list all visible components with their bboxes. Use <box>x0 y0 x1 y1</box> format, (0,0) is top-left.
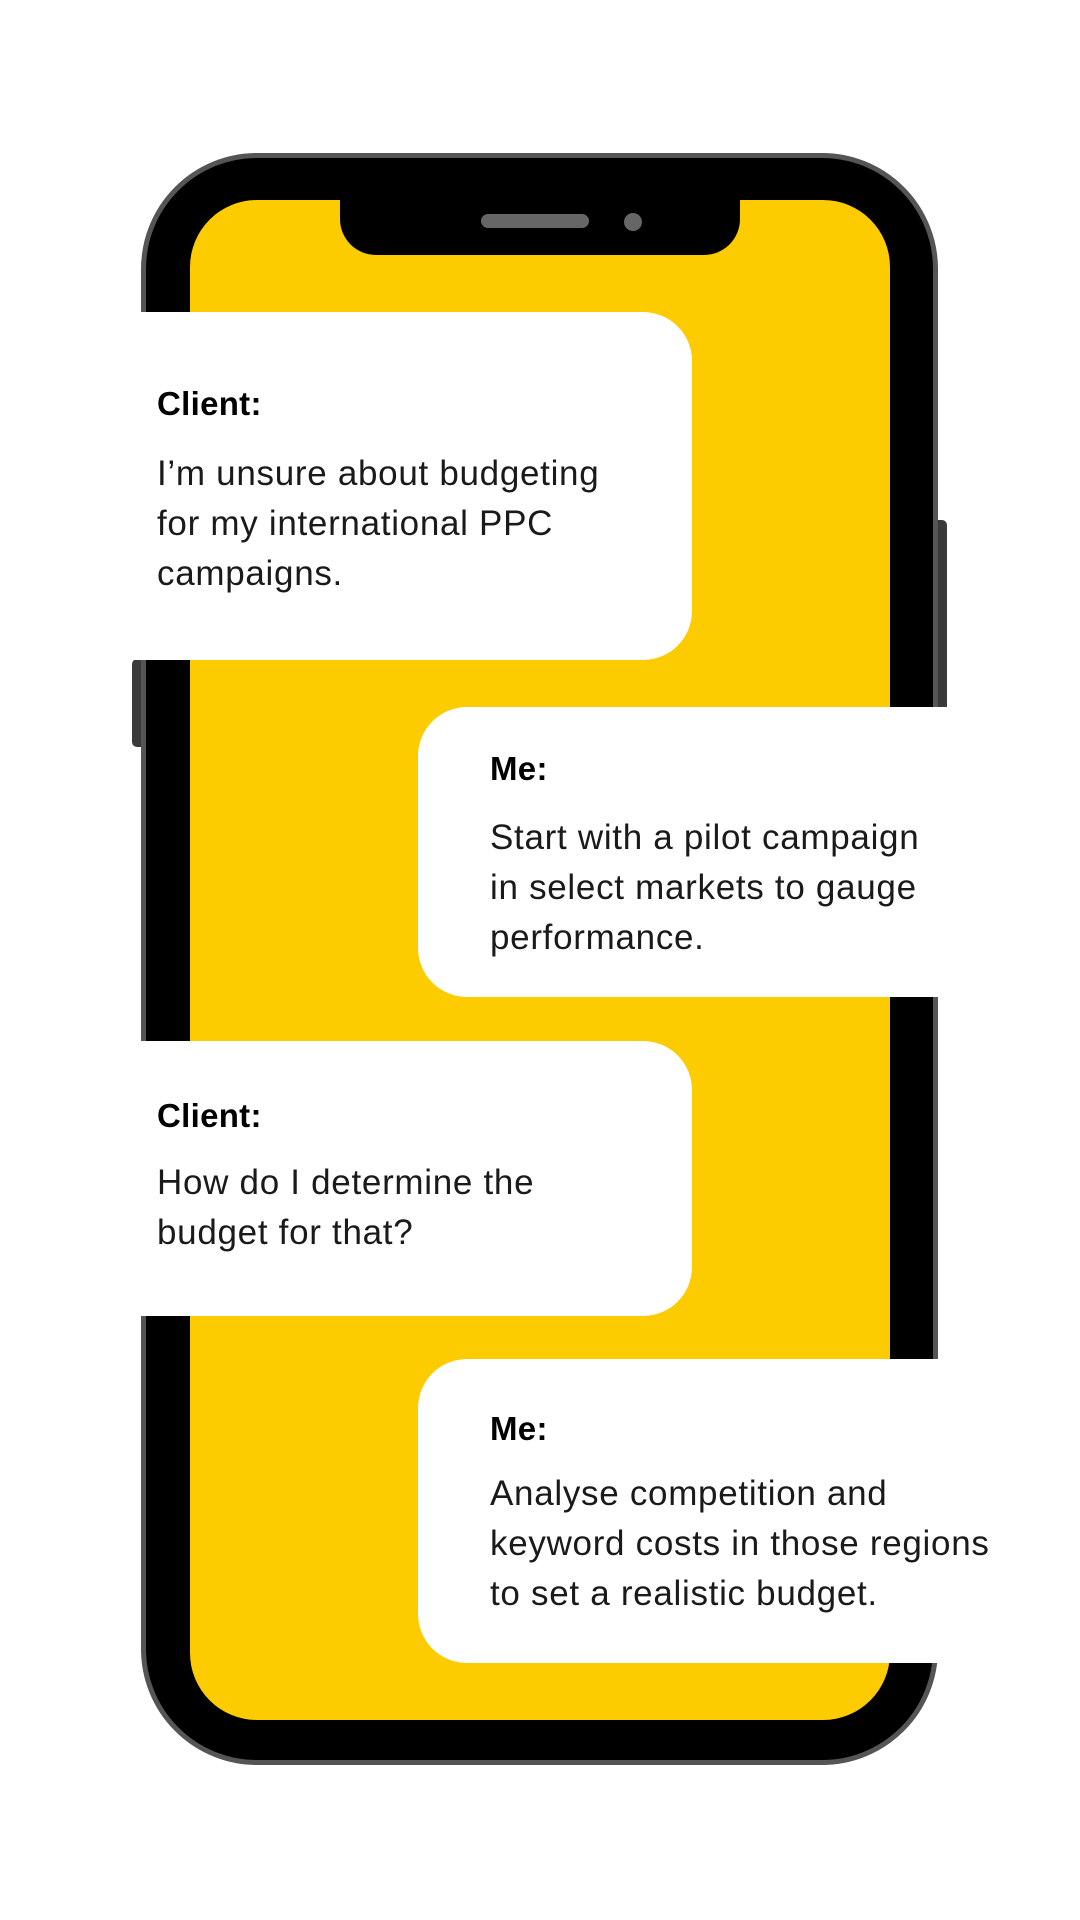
text: client question 2 <box>157 1163 534 1252</box>
text: me answer 1: in select markets to gauge <box>490 868 917 907</box>
camera <box>624 213 642 231</box>
bubble: client 1 <box>100 312 692 660</box>
text: me answer 2: to set a realistic budget. <box>490 1574 878 1613</box>
label: Me: Me: <box>490 1410 548 1447</box>
phone body <box>141 153 938 1765</box>
text: client question 1: campaigns. <box>157 554 343 593</box>
text: me answer 1 <box>490 818 919 957</box>
text: client question 1 <box>157 454 599 593</box>
text: me answer 2: Analyse competition and <box>490 1474 887 1513</box>
text: client question 1: I’m unsure about budgeting <box>157 454 599 493</box>
notch <box>340 193 740 255</box>
text: me answer 2 <box>490 1474 990 1613</box>
bubble: me 1 <box>418 707 1080 997</box>
text: client question 2: How do I determine the <box>157 1163 534 1202</box>
phone <box>132 153 947 1765</box>
label: Me: Me: <box>490 750 548 787</box>
side button right <box>932 520 947 720</box>
text: me answer 1: performance. <box>490 918 705 957</box>
bubble: client 2 <box>100 1041 692 1316</box>
label: Client: Client: <box>157 385 262 422</box>
screen <box>190 200 890 1720</box>
bubble: me 2 <box>418 1359 1080 1663</box>
side button left <box>132 659 144 747</box>
speaker <box>481 214 589 228</box>
text: me answer 2: keyword costs in those regions <box>490 1524 990 1563</box>
label: Client: Client: <box>157 1097 262 1134</box>
text: me answer 1: Start with a pilot campaign <box>490 818 919 857</box>
text: client question 2: budget for that? <box>157 1213 413 1252</box>
text: client question 1: for my international PPC <box>157 504 553 543</box>
